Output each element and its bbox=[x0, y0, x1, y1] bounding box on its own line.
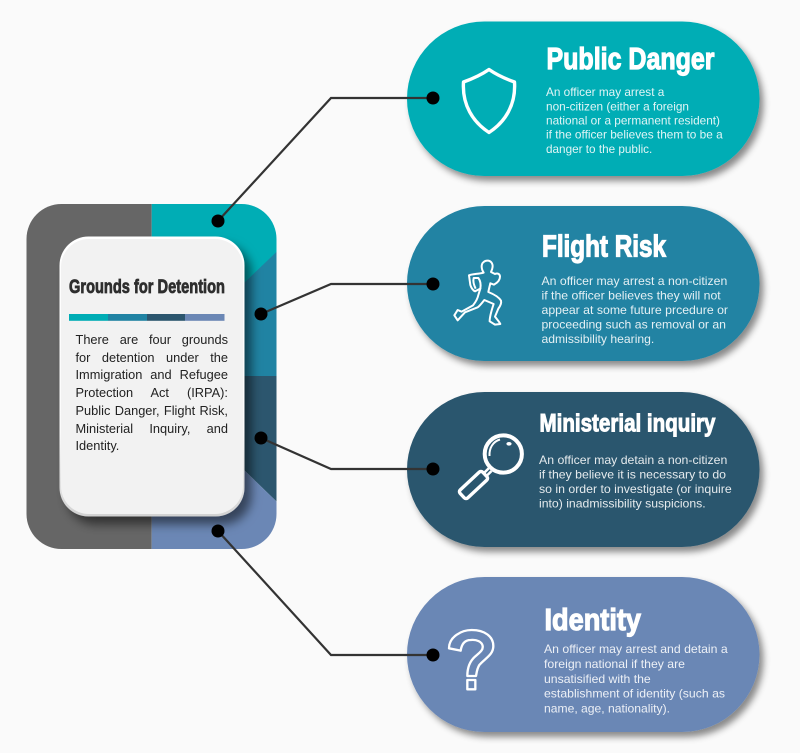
connector: Public Danger bbox=[212, 92, 440, 228]
text: card paragraph: Ministerial Inquiry, and bbox=[76, 421, 228, 436]
text: Ministerial inquiry description: so in order to investigate (or inquire bbox=[539, 482, 732, 496]
text: Public Danger description: national or a permanent resident) bbox=[546, 114, 720, 128]
text: Flight Risk description: admissibility hearing. bbox=[542, 332, 654, 346]
text: card paragraph bbox=[76, 332, 228, 453]
icon: runner bbox=[454, 261, 501, 325]
text: Identity description: name, age, nationality). bbox=[544, 702, 670, 716]
color key bar bbox=[69, 314, 224, 321]
text: Flight Risk description: An officer may arrest a non-citizen bbox=[542, 274, 727, 288]
text: card paragraph: Public Danger, Flight Risk, bbox=[76, 403, 228, 418]
text: Identity description bbox=[544, 642, 728, 716]
text: Public Danger description bbox=[546, 85, 723, 156]
text: Ministerial inquiry description: into) inadmissibility suspicions. bbox=[539, 497, 706, 511]
panel: center card bbox=[60, 236, 244, 516]
panel: grounds background blocks bbox=[26, 204, 277, 549]
text: Public Danger description: non-citizen (either a foreign bbox=[546, 99, 689, 113]
text: Flight Risk description: if the officer believes they will not bbox=[542, 288, 721, 302]
panel: Ministerial inquiry bbox=[407, 392, 760, 547]
text: card paragraph: for detention under the bbox=[76, 350, 228, 365]
text: Identity description: foreign national if they are bbox=[544, 657, 685, 671]
text: card paragraph: There are four grounds bbox=[76, 332, 228, 347]
text: Identity description: An officer may arrest and detain a bbox=[544, 642, 728, 656]
text: card paragraph: Immigration and Refugee bbox=[76, 367, 228, 382]
text: card paragraph: Protection Act (IRPA): bbox=[76, 385, 228, 400]
heading: Ministerial inquiry: Ministerial inquiry bbox=[540, 410, 716, 438]
text: Public Danger description: danger to the public. bbox=[546, 142, 652, 156]
text: Flight Risk description bbox=[542, 274, 728, 346]
heading: Identity: Identity bbox=[544, 602, 642, 637]
panel: Public Danger bbox=[407, 22, 760, 176]
icon: question mark bbox=[449, 630, 493, 689]
panel: Identity bbox=[407, 577, 760, 732]
text: Flight Risk description: appear at some future prcedure or bbox=[542, 303, 728, 317]
text: Public Danger description: An officer may arrest a bbox=[546, 85, 665, 99]
icon: shield bbox=[463, 70, 515, 132]
connector: Flight Risk bbox=[254, 278, 440, 320]
text: Public Danger description: if the officer believes them to be a bbox=[546, 128, 723, 142]
heading: Public Danger: Public Danger bbox=[546, 41, 714, 76]
connector: Identity bbox=[212, 524, 440, 662]
text: Ministerial inquiry description: if they believe it is necessary to do bbox=[539, 468, 726, 482]
text: Identity description: establishment of identity (such as bbox=[544, 687, 725, 701]
heading: Flight Risk: Flight Risk bbox=[542, 229, 667, 264]
text: Flight Risk description: proceeding such as removal or an bbox=[542, 318, 726, 332]
connector: Ministerial inquiry bbox=[254, 432, 440, 476]
icon: magnifying glass bbox=[458, 435, 522, 500]
text: Ministerial inquiry description: An officer may detain a non-citizen bbox=[539, 453, 727, 467]
text: Identity description: unsatisified with the bbox=[544, 672, 651, 686]
text: Ministerial inquiry description bbox=[539, 453, 732, 511]
text: card paragraph: Identity. bbox=[76, 438, 119, 453]
panel: Flight Risk bbox=[407, 206, 760, 361]
heading: Grounds for Detention: Grounds for Detention bbox=[69, 276, 225, 298]
